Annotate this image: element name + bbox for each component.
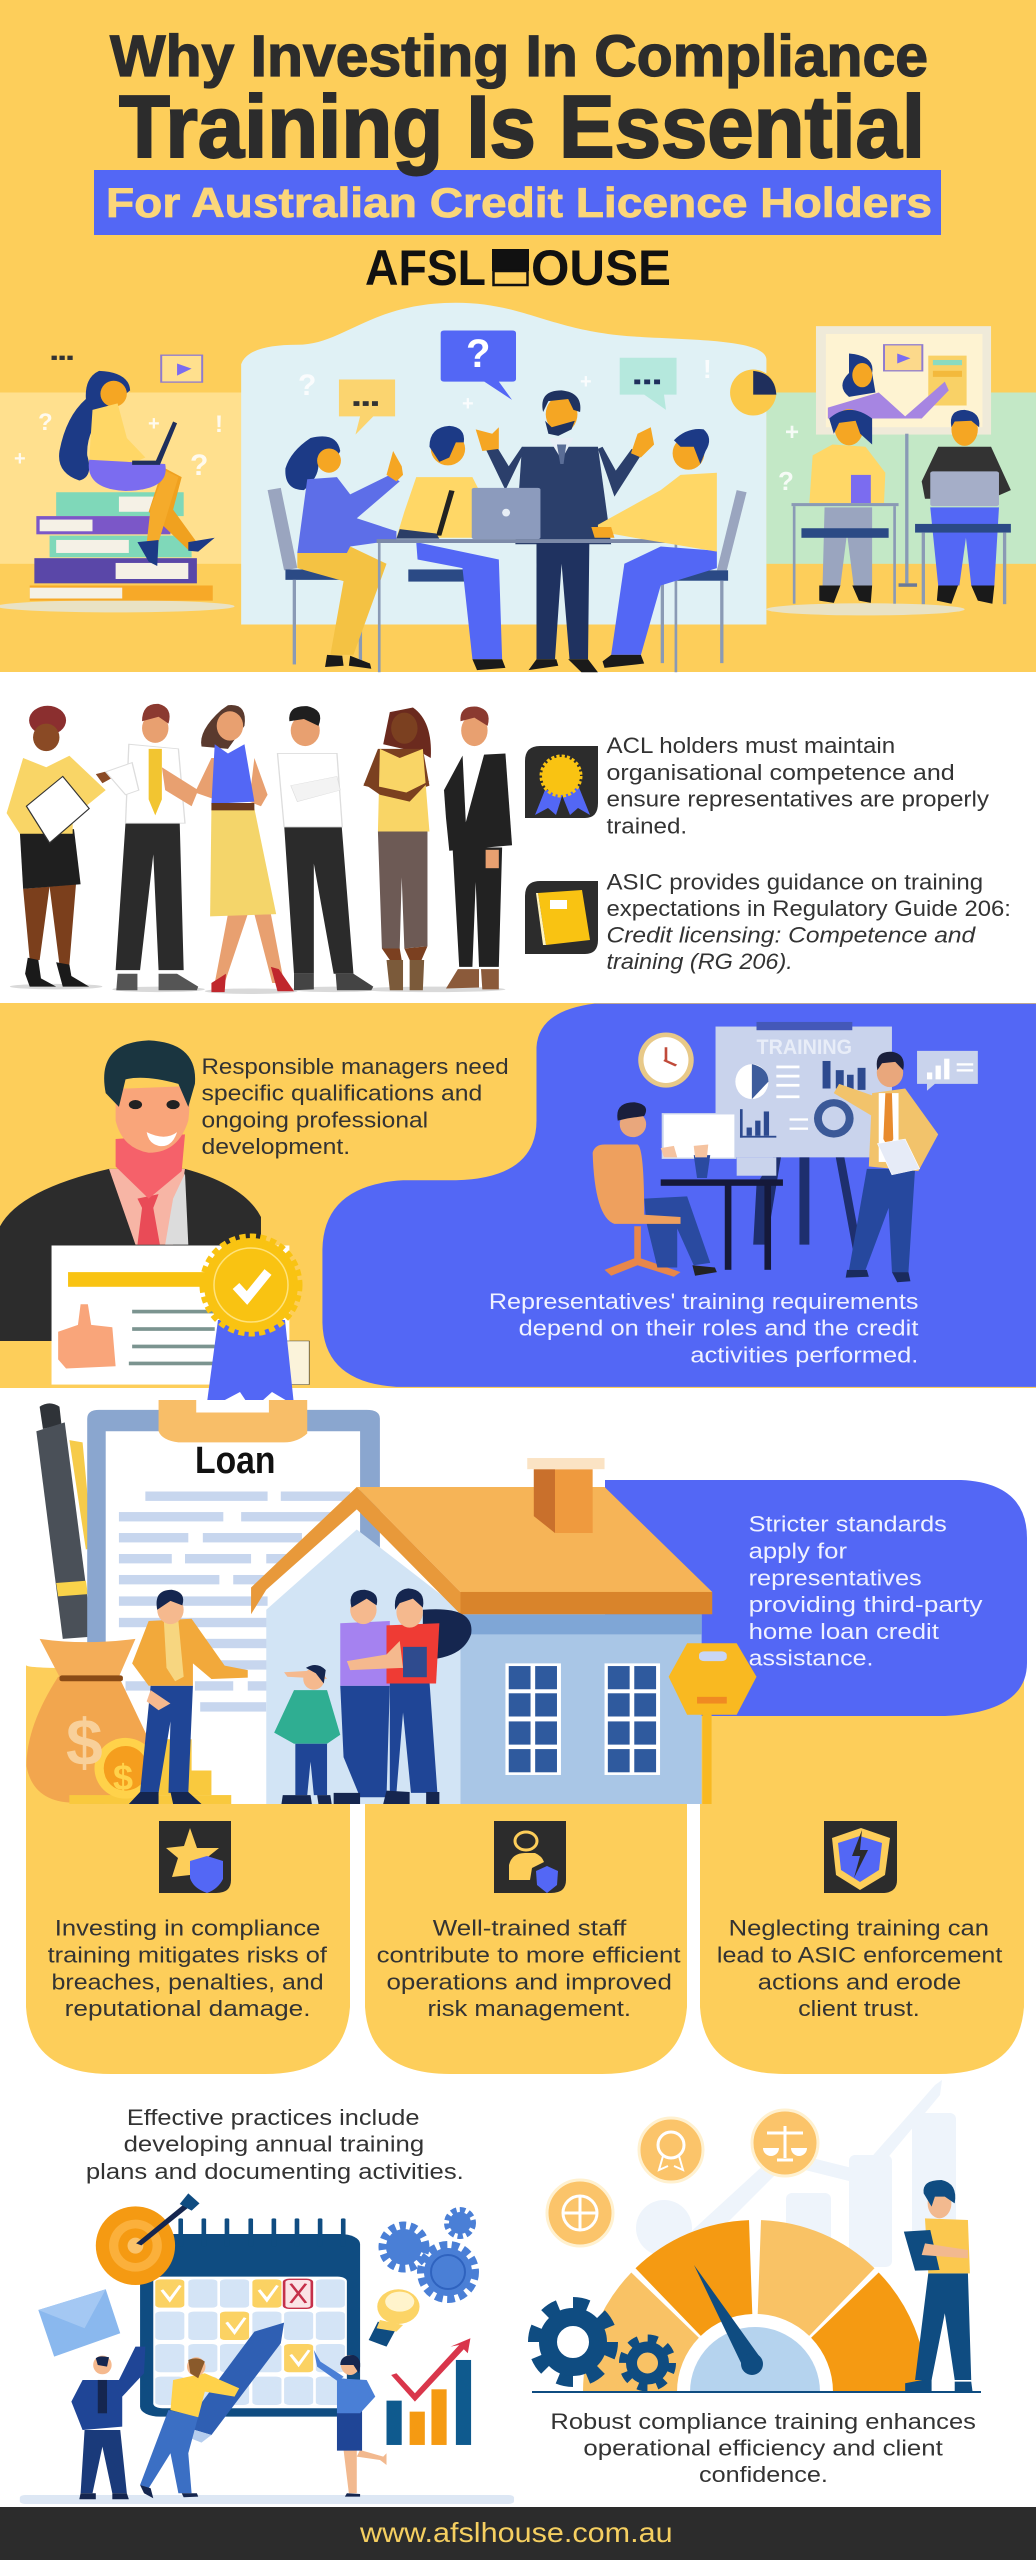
medallion: award [639, 2118, 703, 2182]
ground [20, 2495, 514, 2504]
question marks and accents: + [14, 448, 26, 470]
man pointing [71, 2347, 145, 2499]
hero background [0, 0, 1036, 672]
text: responsible managers: development. [202, 1134, 350, 1159]
text: ACL holders: ensure representatives are properly [606, 787, 989, 812]
text: representatives [489, 1289, 918, 1368]
loan and house illustration [26, 1400, 757, 1804]
text: ACL holders: trained. [606, 813, 687, 838]
certificate seal [204, 1238, 298, 1410]
text: card three: lead to ASIC enforcement [717, 1942, 1002, 1968]
envelope [38, 2289, 120, 2357]
person six [444, 707, 512, 989]
panel: managers and representatives [0, 1003, 1036, 1410]
medallion: scales [752, 2110, 818, 2176]
subtitle: For Australian Credit Licence Holders [106, 179, 932, 226]
text: card one: breaches, penalties, and [52, 1969, 324, 1994]
gauge illustration [532, 2080, 981, 2393]
big pencil [184, 2323, 284, 2443]
question marks and accents: + [462, 393, 474, 415]
panel: stricter standards: representatives [749, 1565, 922, 1590]
footer [0, 2507, 1036, 2560]
panel: stricter standards: Stricter standards [749, 1512, 947, 1537]
text: card three [717, 1916, 1002, 2021]
wall clock [638, 1033, 694, 1088]
logo: AFSL [365, 240, 486, 296]
person two [106, 704, 198, 990]
question mark in bubble: ? [466, 332, 490, 376]
text: responsible managers: Responsible managers need [202, 1054, 509, 1079]
text: ASIC guidance: Credit licensing: Competence and [606, 922, 976, 948]
title line 2: Training Is Essential [119, 77, 925, 176]
text: ASIC guidance: training (RG 206). [606, 949, 793, 974]
text: card two [377, 1916, 680, 2021]
text: robust compliance [550, 2409, 976, 2487]
question marks and accents [14, 354, 799, 496]
text: card two: risk management. [428, 1996, 631, 2021]
text: responsible managers [202, 1054, 509, 1159]
dollar signs [66, 1705, 133, 1798]
icon: medal [525, 746, 598, 818]
text: card one [48, 1916, 328, 2021]
question marks and accents: ! [215, 411, 223, 438]
text: robust compliance: Robust compliance training enhances [550, 2409, 976, 2434]
calendar [140, 2218, 360, 2417]
key [669, 1643, 757, 1804]
logo [365, 240, 671, 296]
text: representatives: activities performed. [690, 1342, 918, 1368]
person one [7, 706, 122, 987]
blue shape [322, 1004, 1036, 1387]
text: effective practices: Effective practices include [127, 2105, 420, 2130]
panel: stricter standards: home loan credit [749, 1619, 939, 1644]
pen [36, 1403, 92, 1639]
person three [195, 705, 294, 992]
text: representatives: depend on their roles and the credit [519, 1316, 918, 1340]
text: robust compliance: confidence. [699, 2462, 828, 2487]
training session group [792, 326, 1011, 604]
gauge segments [583, 2220, 927, 2392]
question marks and accents: ? [38, 409, 53, 436]
standing presenter [834, 1052, 938, 1282]
footer: www.afslhouse.com.au [359, 2517, 673, 2548]
training desk and board [661, 1022, 892, 1270]
clipboard [87, 1400, 380, 1804]
text: card three: client trust. [798, 1996, 920, 2021]
medallion: pie chart [547, 2180, 613, 2246]
base line [532, 2391, 981, 2393]
panel: three benefit cards [26, 1650, 1024, 2074]
chart bubble [917, 1051, 978, 1091]
text: ASIC guidance [606, 869, 1011, 974]
text: ASIC guidance: ASIC provides guidance on training [606, 869, 983, 894]
gauge hub [690, 2327, 820, 2392]
family [274, 1588, 471, 1804]
faint background chart [636, 2080, 956, 2313]
question marks and accents: + [148, 413, 160, 435]
icon: star and shield [159, 1821, 231, 1893]
panel: stricter standards: assistance. [749, 1646, 873, 1671]
panel: stricter standards: apply for [749, 1538, 847, 1564]
text: ACL holders: organisational competence and [606, 760, 955, 785]
title block [94, 24, 941, 235]
panel: stricter standards: providing third-party [749, 1592, 982, 1617]
gears [384, 2211, 473, 2297]
top-left chat dots and video icon [52, 355, 202, 382]
dollar signs: $ [113, 1757, 133, 1798]
text: ACL holders [606, 733, 989, 838]
gears [535, 2304, 672, 2387]
speech bubbles [339, 330, 776, 435]
training board heading: TRAINING [756, 1036, 852, 1059]
dollar signs: $ [66, 1705, 103, 1779]
question marks and accents: + [580, 371, 592, 393]
meeting table group [268, 390, 747, 672]
text: card three: Neglecting training can [729, 1916, 989, 1941]
panel: stricter standards [605, 1480, 1027, 1716]
text: ASIC guidance: expectations in Regulatory Guide 206: [606, 896, 1011, 921]
loan agent [129, 1590, 248, 1804]
text: ACL holders: ACL holders must maintain [606, 733, 895, 758]
text: card one: training mitigates risks of [48, 1942, 328, 1968]
question marks and accents: ! [703, 354, 712, 384]
books and seated reader [30, 371, 215, 601]
text: card three: actions and erode [758, 1969, 961, 1994]
seated man [593, 1102, 717, 1277]
question marks and accents: ? [298, 369, 316, 402]
man with tablet [904, 2180, 973, 2392]
text: representatives: Representatives' training requirements [489, 1289, 918, 1314]
woman reaching [314, 2350, 387, 2497]
person five [363, 708, 431, 990]
text: card two: Well-trained staff [433, 1916, 627, 1941]
text: card two: contribute to more efficient [377, 1942, 680, 1968]
person four [277, 706, 373, 990]
calendar planning illustration [20, 2193, 514, 2504]
hero illustration [0, 303, 1036, 672]
Loan heading: Loan [195, 1440, 276, 1482]
text: effective practices [86, 2105, 464, 2184]
logo: OUSE [531, 240, 671, 296]
title line 1: Why Investing In Compliance [110, 24, 928, 89]
target and arrow [96, 2193, 200, 2285]
gauge needle [694, 2265, 763, 2375]
team illustration [7, 704, 512, 994]
light bulb [369, 2289, 420, 2347]
subtitle band [94, 170, 941, 235]
responsible manager [0, 1040, 261, 1341]
bar chart [387, 2338, 471, 2445]
text: effective practices: developing annual training [124, 2132, 424, 2157]
man with yellow shirt [140, 2357, 239, 2498]
text: effective practices: plans and documenting activities. [86, 2159, 464, 2184]
icon: person and shield [494, 1821, 566, 1893]
question marks and accents: + [785, 419, 799, 446]
text: card one: reputational damage. [65, 1996, 310, 2021]
question marks and accents: ? [778, 466, 794, 496]
text: card two: operations and improved [386, 1969, 672, 1994]
question marks and accents: ? [190, 449, 208, 482]
text: responsible managers: specific qualifications and [202, 1080, 482, 1105]
icon: guide book [525, 881, 598, 954]
money bag and coins [26, 1639, 231, 1804]
certificate [52, 1245, 309, 1385]
text: robust compliance: operational efficiency and client [583, 2436, 943, 2461]
text: responsible managers: ongoing professional [202, 1108, 428, 1132]
house [251, 1458, 712, 1804]
text: card one: Investing in compliance [55, 1916, 320, 1941]
icon: broken shield [824, 1821, 897, 1893]
